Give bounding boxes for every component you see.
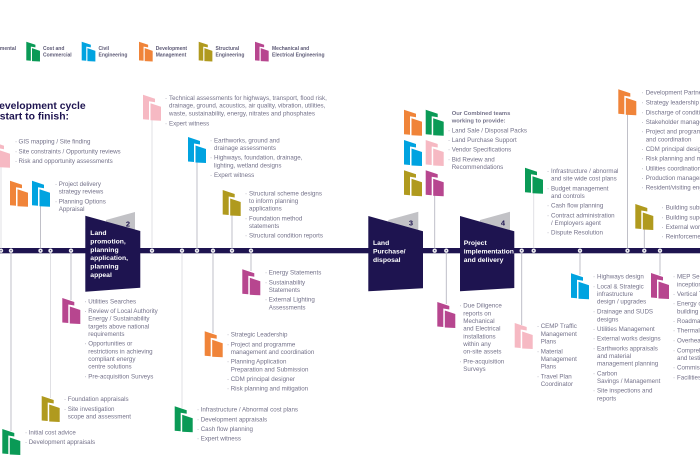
- stems above and below the bar: [1, 114, 660, 431]
- item: utilities searches: Utilities Searches: [88, 298, 136, 305]
- stage 2 block: planning: [90, 264, 119, 271]
- timeline markers: [0, 248, 662, 253]
- item: utilities searches: centre solutions: [88, 364, 132, 371]
- item: combined teams: ·: [448, 127, 450, 134]
- item: structural scheme designs: ·: [245, 233, 247, 240]
- item: mep services: ·: [673, 365, 675, 372]
- item: utilities searches: Review of Local Authority: [88, 308, 159, 315]
- item: combined teams: Our Combined teams: [452, 111, 510, 117]
- item: foundation appraisals: Site investigation: [68, 406, 115, 413]
- item: highways design: Carbon: [597, 370, 618, 377]
- item: strategic leadership: [205, 331, 315, 393]
- item: initial cost advice: [2, 429, 95, 455]
- item: traffic management plans: Plans: [541, 339, 556, 346]
- item: strategic leadership: ·: [227, 331, 229, 338]
- timeline bar: [0, 248, 700, 253]
- stage 4 block: [460, 212, 514, 291]
- item: due diligence: ·: [460, 358, 462, 365]
- legend: civil engineering: Civil: [98, 46, 109, 52]
- item: mep services: ·: [673, 374, 675, 381]
- legend: development management: [139, 42, 187, 61]
- item: infrastructure and budget: Budget management: [551, 185, 609, 192]
- item: traffic management plans: CEMP Traffic: [541, 323, 577, 330]
- legend: cost and commercial: Commercial: [43, 53, 72, 59]
- stage 2 block: promotion,: [90, 238, 126, 245]
- item: highways design: designs: [597, 316, 618, 323]
- item: utilities searches: ·: [84, 341, 87, 348]
- item: traffic management plans: [515, 323, 577, 388]
- item: infrastructure cost plans: ·: [197, 416, 199, 423]
- item: building substructure: ·: [662, 234, 664, 241]
- item: infrastructure cost plans: [175, 406, 298, 443]
- item: building substructure: ·: [662, 214, 664, 221]
- item: utilities searches: requirements: [88, 331, 124, 338]
- item: infrastructure and budget: [525, 168, 618, 237]
- item: development partner: Utilities coordination: [646, 165, 700, 172]
- item: project delivery reviews: ·: [55, 198, 57, 205]
- item: environmental site finding: GIS mapping / Site finding: [18, 139, 91, 146]
- stage 2 block: planning: [90, 247, 119, 254]
- item: highways design: ·: [593, 370, 595, 377]
- item: project delivery reviews: ·: [55, 181, 57, 188]
- item: initial cost advice: Development appraisals: [29, 439, 95, 446]
- item: project delivery reviews: [10, 181, 106, 213]
- stage 3 block: 3: [409, 219, 413, 228]
- item: technical assessments: waste, sustainability, energy, nitrates and phosphates: [168, 110, 315, 117]
- item: highways design: Drainage and SUDS: [597, 308, 653, 315]
- item: foundation appraisals: scope and assessment: [68, 414, 131, 421]
- item: energy statements: [242, 269, 321, 311]
- stage 3 block: Land: [373, 240, 389, 247]
- item: utilities searches: ·: [84, 373, 87, 380]
- stage 2 block: Land: [90, 230, 107, 237]
- item: infrastructure cost plans: Cash flow planning: [201, 426, 254, 433]
- item: environmental site finding: ·: [15, 158, 17, 165]
- item: earthworks and highways: Earthworks, ground and: [214, 137, 280, 144]
- item: structural scheme designs: statements: [249, 223, 279, 230]
- legend: development management: Development: [156, 46, 187, 52]
- item: strategic leadership: ·: [227, 359, 229, 366]
- item: development partner: ·: [642, 175, 644, 182]
- item: technical assessments: drainage, ground, acoustics, air quality, vibration, utilities,: [169, 103, 326, 110]
- item: highways design: Utilities Management: [597, 326, 655, 333]
- item: development partner: Strategy leadership: [646, 99, 700, 106]
- item: highways design: management planning: [597, 361, 659, 368]
- item: infrastructure and budget: / Employers agent: [551, 220, 601, 227]
- stage 2 block: appeal: [90, 272, 112, 279]
- item: technical assessments: ·: [165, 120, 167, 127]
- item: traffic management plans: Management: [541, 331, 577, 338]
- item: building substructure: ·: [662, 205, 664, 212]
- item: technical assessments: Expert witness: [169, 120, 209, 127]
- item: structural scheme designs: Foundation method: [249, 215, 303, 222]
- item: development partner: [618, 89, 700, 192]
- item: technical assessments: ·: [165, 95, 167, 102]
- item: highways design: ·: [593, 336, 595, 343]
- item: utilities searches: restrictions in achieving: [88, 348, 153, 355]
- legend: structural engineering: Engineering: [216, 53, 244, 59]
- item: structural scheme designs: applications: [249, 206, 282, 213]
- item: development partner: ·: [642, 99, 644, 106]
- stage 4 block: implementation: [464, 248, 514, 256]
- item: project delivery reviews: strategy reviews: [59, 189, 103, 196]
- item: highways design: ·: [593, 388, 595, 395]
- item: strategic leadership: ·: [227, 341, 229, 348]
- item: infrastructure cost plans: ·: [197, 436, 199, 443]
- item: energy statements: Sustainability: [269, 279, 306, 286]
- item: development partner: ·: [642, 109, 644, 116]
- item: mep services: ·: [673, 318, 675, 325]
- item: strategic leadership: Project and programme: [231, 341, 296, 348]
- legend: civil engineering: Engineering: [98, 53, 127, 59]
- item: infrastructure cost plans: Development appraisals: [201, 416, 267, 423]
- item: due diligence: and Electrical: [463, 326, 500, 333]
- item: due diligence: Mechanical: [463, 318, 495, 325]
- item: infrastructure and budget: and site wide cost plans: [551, 176, 617, 183]
- item: energy statements: Energy Statements: [269, 270, 321, 277]
- item: structural scheme designs: [223, 190, 323, 240]
- item: environmental site finding: Risk and opportunity assessments: [18, 158, 113, 165]
- item: highways design: ·: [593, 283, 595, 290]
- item: combined teams: Land Purchase Support: [452, 137, 517, 144]
- item: development partner: and coordination: [646, 136, 692, 143]
- item: energy statements: Assessments: [269, 304, 305, 311]
- item: due diligence: within any: [462, 341, 492, 348]
- item: initial cost advice: ·: [25, 429, 27, 436]
- item: combined teams: Land Sale / Disposal Packs: [452, 127, 527, 134]
- stage 4 block: Project: [464, 240, 487, 247]
- item: foundation appraisals: ·: [64, 406, 66, 413]
- item: highways design: ·: [593, 326, 595, 333]
- item: environmental site finding: ·: [15, 148, 17, 155]
- item: initial cost advice: Initial cost advice: [29, 429, 76, 436]
- item: strategic leadership: CDM principal designer: [231, 376, 295, 383]
- legend: structural engineering: [199, 42, 244, 61]
- item: mep services: ·: [673, 291, 675, 298]
- item: combined teams: ·: [448, 147, 450, 154]
- item: project delivery reviews: Planning Options: [59, 198, 106, 205]
- item: highways design: External works designs: [597, 336, 661, 343]
- item: structural scheme designs: to inform planning: [249, 198, 299, 205]
- stage 4 block: and delivery: [464, 257, 504, 264]
- item: mep services: [651, 273, 700, 381]
- item: utilities searches: ·: [84, 298, 87, 305]
- item: infrastructure cost plans: ·: [197, 407, 199, 414]
- item: strategic leadership: Strategic Leadership: [231, 331, 288, 338]
- item: utilities searches: Energy / Sustainability: [88, 316, 150, 323]
- item: mep services: ·: [673, 338, 675, 345]
- item: due diligence: ·: [460, 303, 462, 310]
- item: development partner: ·: [642, 146, 644, 153]
- item: infrastructure and budget: ·: [547, 230, 549, 237]
- item: traffic management plans: Travel Plan: [541, 373, 572, 380]
- item: infrastructure and budget: ·: [547, 203, 549, 210]
- item: highways design: Earthworks appraisals: [597, 345, 658, 352]
- item: environmental site finding: [0, 139, 121, 168]
- item: utilities searches: compliant energy: [88, 356, 136, 363]
- item: earthworks and highways: lighting, wetland designs: [214, 162, 281, 169]
- item: strategic leadership: Risk planning and mitigation: [231, 386, 309, 393]
- item: building substructure: ·: [662, 224, 664, 231]
- item: development partner: ·: [642, 156, 644, 163]
- item: infrastructure and budget: Dispute Resolution: [551, 230, 603, 237]
- item: strategic leadership: ·: [227, 386, 229, 393]
- item: mep services: ·: [673, 347, 675, 354]
- item: strategic leadership: management and coordination: [231, 349, 315, 356]
- item: traffic management plans: Plans: [541, 364, 556, 371]
- item: energy statements: ·: [265, 270, 267, 277]
- item: traffic management plans: ·: [537, 373, 539, 380]
- item: earthworks and highways: Highways, foundation, drainage,: [214, 155, 303, 162]
- item: traffic management plans: ·: [537, 323, 539, 330]
- item: due diligence: Surveys: [463, 366, 486, 373]
- item: structural scheme designs: Structural scheme designs: [249, 190, 322, 197]
- item: utilities searches: targets above national: [88, 323, 149, 330]
- item: infrastructure cost plans: Infrastructure / Abnormal cost plans: [201, 407, 298, 414]
- item: highways design: infrastructure: [597, 291, 634, 298]
- item: earthworks and highways: ·: [210, 137, 212, 144]
- item: technical assessments: Technical assessments for highways, transport, flood risk,: [169, 95, 327, 102]
- item: foundation appraisals: [42, 396, 131, 422]
- item: energy statements: External Lighting: [269, 297, 315, 304]
- item: infrastructure and budget: ·: [547, 212, 549, 219]
- legend: mechanical and electrical engineering: Mechanical and: [272, 46, 309, 52]
- item: due diligence: Pre-acquisition: [463, 358, 505, 365]
- item: earthworks and highways: drainage assessments: [214, 145, 276, 152]
- item: project delivery reviews: Appraisal: [59, 206, 84, 213]
- item: project delivery reviews: Project delivery: [59, 181, 102, 188]
- stage 2 block: [85, 212, 140, 292]
- item: highways design: ·: [593, 274, 595, 281]
- item: initial cost advice: ·: [25, 439, 27, 446]
- item: strategic leadership: Planning Application: [231, 359, 287, 366]
- item: highways design: ·: [593, 308, 595, 315]
- item: due diligence: on-site assets: [463, 349, 501, 356]
- legend: mechanical and electrical engineering: [255, 42, 325, 61]
- item: traffic management plans: ·: [537, 348, 539, 355]
- item: infrastructure and budget: and controls: [551, 193, 585, 200]
- item: structural scheme designs: ·: [245, 215, 247, 222]
- stage 3 block: disposal: [373, 257, 401, 264]
- item: earthworks and highways: ·: [210, 172, 212, 179]
- item: earthworks and highways: ·: [210, 155, 212, 162]
- item: due diligence: Due Diligence: [463, 303, 502, 310]
- item: structural scheme designs: Structural condition reports: [249, 233, 323, 240]
- item: highways design: Site inspections and: [597, 388, 653, 395]
- item: due diligence: [437, 302, 505, 373]
- legend: cost and commercial: Cost and: [43, 46, 64, 52]
- item: highways design: and material: [597, 353, 631, 360]
- item: utilities searches: ·: [84, 308, 87, 315]
- item: development partner: ·: [642, 119, 644, 126]
- item: mep services: ·: [673, 301, 675, 308]
- item: traffic management plans: Management: [541, 356, 577, 363]
- item: foundation appraisals: ·: [64, 396, 66, 403]
- legend: [0, 42, 325, 61]
- item: development partner: ·: [642, 90, 644, 97]
- item: building substructure: [635, 204, 700, 241]
- item: structural scheme designs: ·: [245, 190, 247, 197]
- item: foundation appraisals: Foundation appraisals: [68, 396, 129, 403]
- legend: civil engineering: [82, 42, 127, 61]
- item: due diligence: reports on: [463, 310, 492, 317]
- item: combined teams: Recommendations: [452, 164, 503, 171]
- item: traffic management plans: Coordinator: [541, 381, 573, 388]
- item: infrastructure and budget: Infrastructure / abnormal: [551, 168, 618, 175]
- item: utilities searches: Pre-acquisition Surveys: [88, 373, 153, 380]
- item: earthworks and highways: [188, 137, 303, 179]
- item: mep services: ·: [673, 274, 675, 281]
- item: combined teams: ·: [448, 156, 450, 163]
- item: energy statements: ·: [265, 297, 267, 304]
- item: infrastructure and budget: Cash flow planning: [551, 203, 604, 210]
- item: highways design: design / upgrades: [597, 299, 646, 306]
- item: combined teams: working to provide:: [451, 119, 506, 125]
- item: combined teams: Vendor Specifications: [452, 147, 511, 154]
- item: earthworks and highways: Expert witness: [214, 172, 254, 179]
- stage 3 block: Purchase/: [373, 248, 406, 256]
- item: due diligence: installations: [463, 333, 496, 340]
- stage 2 block: 2: [126, 220, 130, 228]
- item: infrastructure and budget: Contract administration: [551, 212, 615, 219]
- item: development partner: ·: [642, 129, 644, 136]
- item: development partner: ·: [642, 185, 644, 192]
- item: infrastructure cost plans: Expert witness: [201, 436, 241, 443]
- stage 3 block: [368, 212, 423, 291]
- item: strategic leadership: Preparation and Submission: [231, 366, 309, 373]
- item: strategic leadership: ·: [227, 376, 229, 383]
- item: combined teams: ·: [448, 137, 450, 144]
- item: combined teams: Bid Review and: [452, 156, 495, 163]
- item: highways design: ·: [593, 345, 595, 352]
- item: traffic management plans: Material: [541, 348, 563, 355]
- item: highways design: Local & Strategic: [597, 283, 644, 290]
- item: highways design: Savings / Management: [597, 378, 661, 385]
- item: utilities searches: Opportunities or: [88, 341, 132, 348]
- item: combined teams: [404, 110, 527, 196]
- item: environmental site finding: Site constraints / Opportunity reviews: [18, 148, 121, 155]
- item: infrastructure and budget: ·: [547, 185, 549, 192]
- legend: mechanical and electrical engineering: Electrical Engineering: [272, 53, 325, 59]
- item: highways design: [571, 273, 661, 402]
- stage 2 block: application,: [90, 255, 128, 262]
- item: utilities searches: [62, 298, 159, 380]
- item: energy statements: ·: [265, 279, 267, 286]
- item: environmental site finding: ·: [15, 139, 17, 146]
- stage 4 block: 4: [501, 219, 506, 228]
- item: highways design: Highways design: [597, 274, 644, 281]
- item: development partner: ·: [642, 165, 644, 172]
- legend: development management: Management: [156, 53, 187, 59]
- item: infrastructure cost plans: ·: [197, 426, 199, 433]
- legend: structural engineering: Structural: [216, 46, 239, 52]
- item: highways design: reports: [597, 395, 616, 402]
- item: infrastructure and budget: ·: [547, 168, 549, 175]
- legend: cost and commercial: [26, 42, 72, 61]
- item: technical assessments: [143, 95, 327, 127]
- item: mep services: ·: [673, 328, 675, 335]
- item: energy statements: Statements: [269, 287, 300, 294]
